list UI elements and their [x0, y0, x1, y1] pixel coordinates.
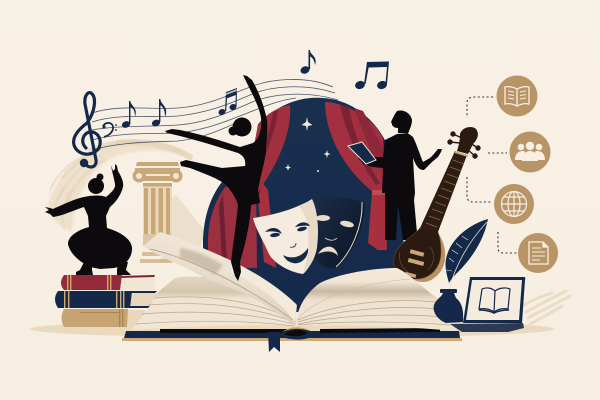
comedy mask: [253, 199, 318, 274]
music note 1: [121, 101, 136, 129]
open book: [122, 232, 462, 352]
left page stack: [132, 277, 296, 330]
stage curtain left: [246, 105, 290, 215]
feather quill: [446, 219, 488, 290]
red book: [61, 275, 155, 290]
left curtain back: [208, 178, 257, 268]
stage curtain right: [325, 102, 386, 192]
staff lines: [92, 79, 338, 150]
laptop: [450, 277, 525, 332]
book stack: [55, 275, 157, 327]
laptop book icon: [479, 288, 510, 313]
right page stack with lifted page: [296, 268, 456, 331]
ribbon: [268, 332, 280, 352]
spine: [280, 327, 312, 340]
navy book: [55, 291, 157, 308]
beamed note top: [354, 62, 389, 90]
ground shadow: [30, 320, 554, 338]
ballerina: [165, 75, 267, 281]
brush strokes left: [48, 140, 206, 262]
icon: people group: [510, 132, 550, 172]
page shadow under: [160, 329, 295, 333]
icon: globe: [494, 184, 534, 224]
performer with book: [348, 110, 442, 240]
tan book: [62, 309, 145, 327]
masks: [253, 195, 365, 274]
icon: open book: [496, 76, 538, 116]
stage arch: [203, 98, 404, 312]
eighth note top: [299, 50, 316, 75]
tragedy mask: [310, 195, 365, 268]
bass clef: [102, 123, 117, 137]
cover: [122, 331, 462, 341]
stars: [285, 117, 330, 172]
held book: [348, 142, 376, 164]
column: [132, 162, 182, 263]
dotted connectors: [467, 97, 517, 253]
icon: document: [518, 233, 558, 273]
music note 2: [151, 99, 166, 127]
beamed note small: [218, 88, 237, 116]
sitar: [394, 127, 480, 283]
treble clef: [74, 93, 100, 167]
lifted left page: [143, 232, 297, 326]
dancer left: [45, 164, 132, 275]
brush strokes right: [522, 291, 570, 324]
inkwell: [434, 289, 463, 323]
